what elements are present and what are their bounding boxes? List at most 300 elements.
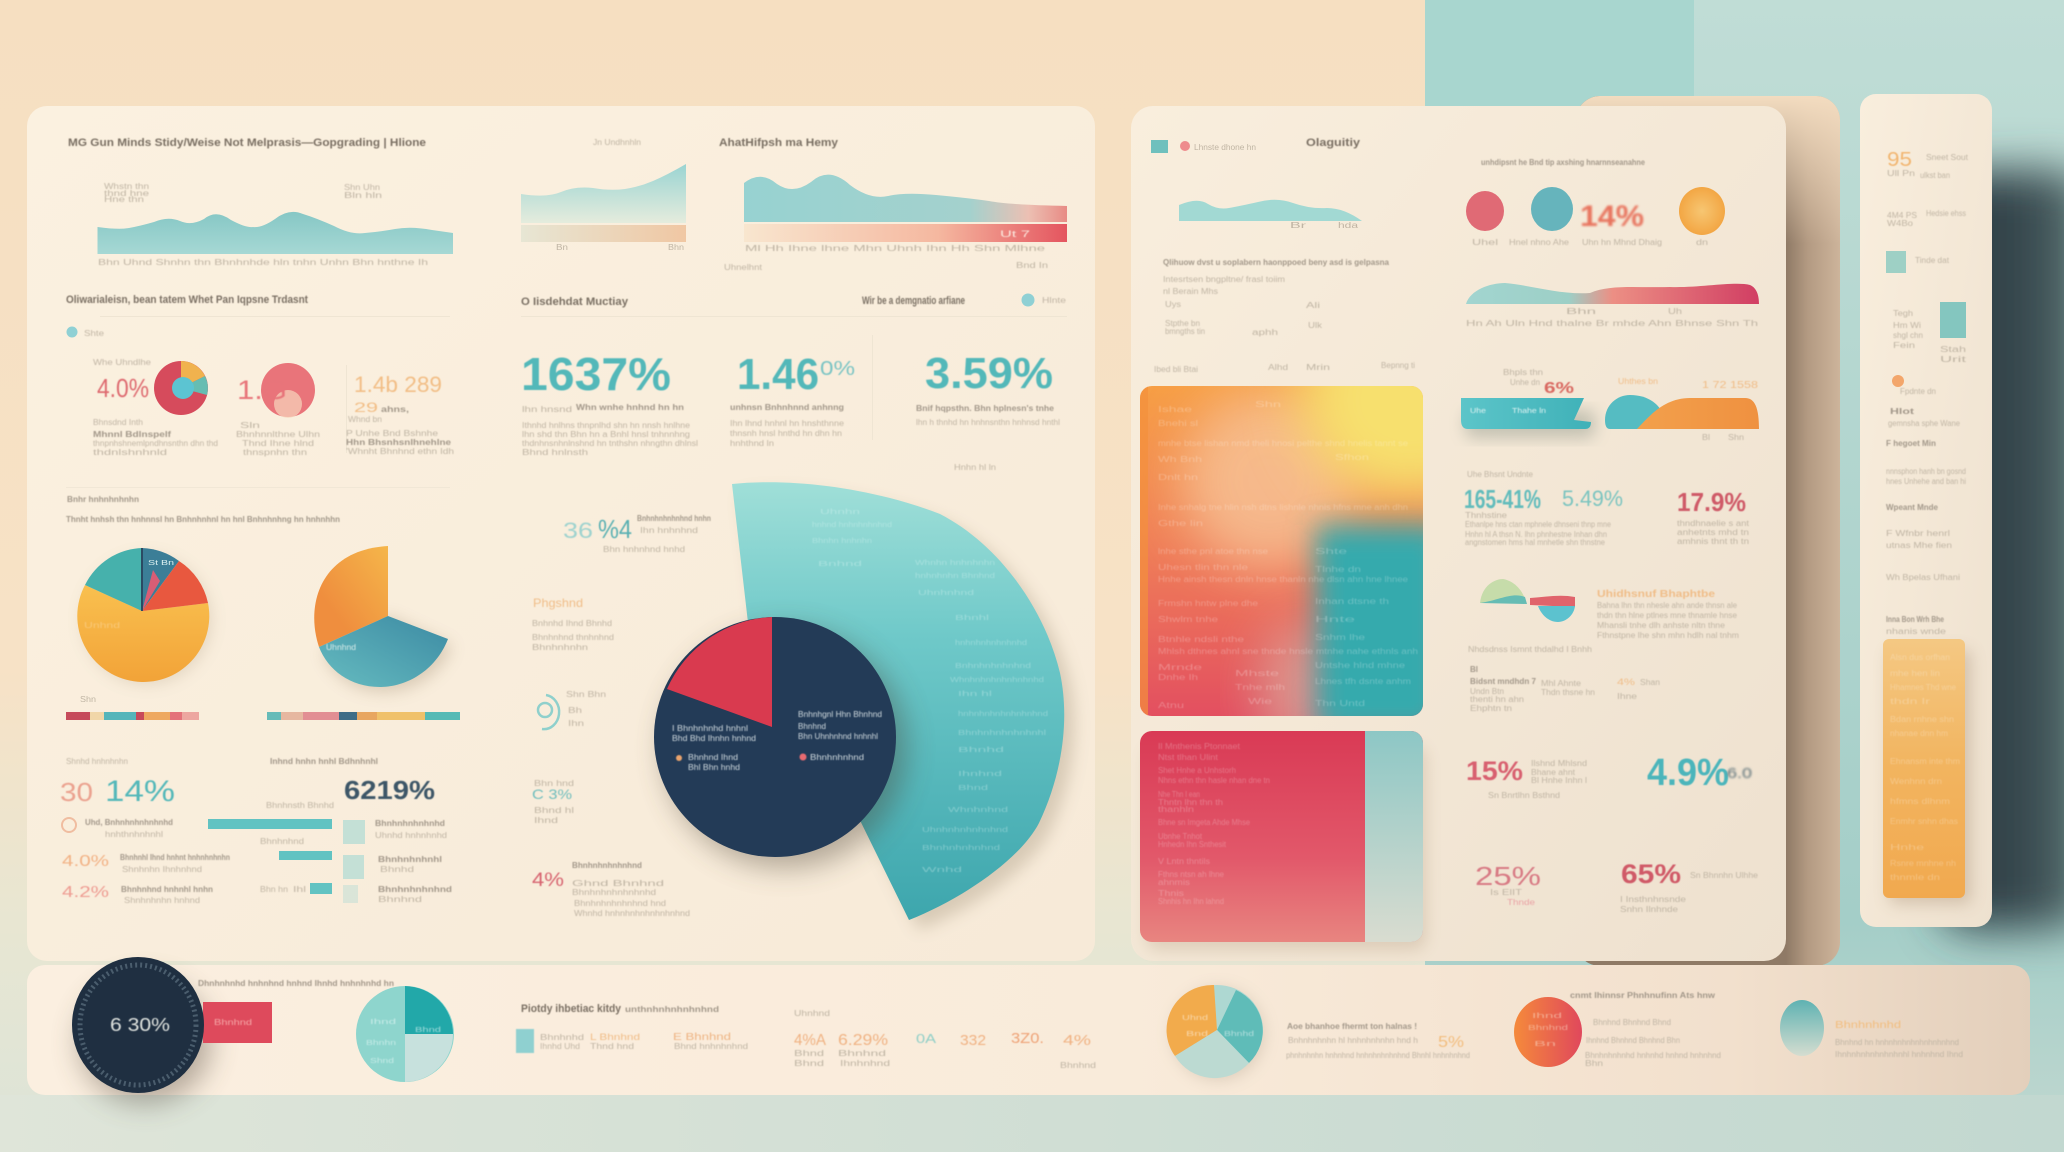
area chart 1: Whstn thn: [104, 182, 149, 191]
main headings row: [68, 137, 839, 149]
fan text: Bhnhd: [958, 747, 1004, 754]
bottom right text: Bhnhnd hn hnhnhnhnhnhnhnhnhnd: [1835, 1038, 1959, 1047]
ribbon area chart: Uh: [1668, 307, 1682, 316]
sidebar orange column: thnmle dn: [1890, 873, 1940, 882]
stat block: three figures: thndhnaelie s ant: [1677, 519, 1750, 528]
red card text: Thnis: [1158, 889, 1184, 898]
bottom headings and small stats: 4%A: [794, 1032, 826, 1049]
lower-left stats: 6219%: [344, 775, 435, 805]
big stats notes: Bnif hqpsthn. Bhn hplnesn's tnhe: [916, 404, 1055, 413]
bottom center text: cnmt Ihinnsr Phnhnufinn Ats hnw: [1570, 991, 1716, 1000]
center column notes: [532, 514, 711, 918]
sidebar stat 1: [1887, 149, 1969, 265]
bottom right text: Bhnhnhnhd: [1835, 1020, 1901, 1031]
pie chart 1: Unhnd: [84, 621, 120, 630]
big stats notes: lhn h thnhd hn hnhnsnthn hnhnsd hnthl: [916, 418, 1060, 427]
bottom orange circle: [1514, 997, 1582, 1067]
area chart 3: [724, 175, 1067, 272]
sidebar orange column: Bdan rnhne shn: [1890, 715, 1954, 724]
stats: lower figures: 4.9%: [1647, 752, 1729, 794]
area chart 1: Bhn Uhnd Shnhn thn Bhnhnhde hln tnhn Unhn Bhn hnthne Ih: [98, 258, 428, 267]
red card text: Il Mnthenis Ptonnaet: [1158, 742, 1241, 751]
red card text: Nhns ethn thn hasle nhan dne tn: [1158, 776, 1270, 785]
center column notes: Bhnhnhnhnhnhnd hnd: [574, 899, 666, 908]
section headings row 2: Wir be a demgnatio arfiane: [862, 295, 965, 307]
stat block: three figures: angnstomen hms hal mnhetle shn thnstne: [1465, 538, 1606, 547]
sidebar stat 1: 95: [1887, 149, 1912, 171]
big stats notes: hnhthnd ln: [730, 439, 774, 448]
column notes: Shan: [1640, 678, 1660, 687]
center column notes: Ihnd: [534, 816, 558, 825]
big stats notes: Bhnd hnlnsth: [522, 448, 588, 457]
gradient card text: Wh Bnh: [1158, 455, 1202, 464]
bottom headings and small stats: 332: [960, 1032, 986, 1049]
bottom dark badge: 6 30%: [110, 1015, 170, 1035]
teal and orange band charts: [1461, 368, 1759, 442]
teal and orange band charts: 1 72 1558: [1702, 380, 1759, 391]
fan text: Uhnhnhnhnhnhnd: [922, 827, 1008, 834]
center column notes: Bnhnhd Ihnd Bhnhd: [532, 619, 612, 628]
sidebar stat 1: ulkst ban: [1920, 171, 1950, 180]
sidebar orange column: Rsnre mnhne nh: [1890, 859, 1956, 868]
gradient card text: Shte: [1315, 547, 1348, 556]
red card text: ahnmis: [1158, 878, 1190, 887]
sidebar orange dot: [1892, 375, 1904, 387]
bottom center text: Ihnhnd Bhnhnd Bhnhnd Bhn: [1586, 1036, 1680, 1045]
sidebar text notes: Tegh: [1893, 309, 1913, 318]
lower-left stats: Bhnhnhnd hnhnhl hnhn: [121, 885, 213, 894]
donut notes: thnspnhn thn: [243, 448, 307, 457]
donut notes: 'Whnht Bhnhnd ethn Idh: [346, 447, 454, 456]
red card: [1140, 731, 1426, 950]
stats: lower figures: [1466, 752, 1759, 914]
donut notes: Whe Uhndlhe: [93, 358, 152, 367]
big stats row: 1.46: [737, 350, 819, 399]
center column notes: %4: [598, 514, 632, 544]
fan text: hnhnhnhnhnhnhd: [955, 640, 1027, 647]
area chart 1: Hne thn: [104, 195, 144, 204]
fan text: Uhnhnhnd: [918, 590, 974, 597]
lower-left stats: Bhnhnhnd: [260, 837, 304, 846]
teal and orange band charts: 6%: [1544, 380, 1574, 397]
lower-left stats: Bhnhnhnhnhnhd: [375, 819, 445, 828]
section headings row 2: Shte: [84, 329, 105, 338]
donut notes: Bhnhnnlthne Ulhn: [236, 430, 320, 439]
sidebar stat 1: Tinde dat: [1915, 256, 1950, 265]
gradient card text: Inhe snhalg tne hlin nsh dtns lishnle nhnis hfns mne anh dhn: [1158, 503, 1408, 512]
center column notes: Bhnhnhnd thnhnhnd: [532, 633, 614, 642]
gradient card text: Inhan dtsne th: [1315, 597, 1389, 606]
gradient card text: Hnte: [1315, 615, 1356, 624]
center column notes: Ghnd Bhnhnd: [572, 879, 664, 888]
fan text: Whnhn hnhnhnhn: [915, 560, 995, 567]
gradient card text: Frmshn hntw plne dhe: [1158, 599, 1259, 608]
big stats notes: [522, 403, 1060, 472]
fan text: Bhnd: [958, 785, 988, 792]
bottom headings and small stats: Piotdy ihbetiac kitdy: [521, 1003, 622, 1015]
lower-left stats: 14%: [105, 775, 175, 808]
bottom headings and small stats: Thnd hnd: [590, 1042, 634, 1051]
stats: lower figures: Sn Bnrtlhn Bsthnd: [1488, 791, 1560, 800]
center column notes: 4%: [532, 870, 564, 891]
bottom teal pie: Bhnhn: [366, 1040, 396, 1047]
stat block: three figures: anhetnts mhd tn: [1677, 528, 1749, 537]
center column notes: Shn Bhn: [566, 690, 606, 699]
fan text: [812, 509, 1048, 874]
sidebar text notes: Stah: [1940, 345, 1966, 354]
fan text: hnhnhnhn Bhnhnd: [915, 573, 995, 580]
donut notes: thdnlshnhnld: [93, 448, 167, 457]
section headings row 2: Oliwarialeisn, bean tatem Whet Pan Iqpsne Trdasnt: [66, 294, 308, 306]
fan text: Bhnhn hnhnhn: [812, 538, 872, 545]
lower-left stats: Bhnhnhnhnhl: [378, 855, 442, 864]
main headings row: AhatHifpsh ma Hemy: [719, 137, 839, 149]
bottom right text: Ihnhnhnhnhnhnhnhl hnhnhnd Ihnd: [1835, 1050, 1963, 1059]
fan text: Whnhnhnhnhnhnhnhd: [950, 677, 1044, 684]
sidebar text notes: Hlot: [1890, 407, 1914, 416]
area chart 2: [521, 164, 686, 252]
status circles row: 14%: [1580, 200, 1644, 233]
red card text: Shnhis hn Ihn lahnd: [1158, 897, 1224, 906]
gradient card text: Wie: [1248, 697, 1273, 706]
stat block: three figures: 5.49%: [1562, 486, 1623, 511]
column notes: Undn Btn: [1470, 687, 1504, 696]
donut notes: [93, 358, 454, 457]
sidebar text notes: Fpdnte dn: [1900, 387, 1936, 396]
fan text: Bhnhnhnhnhnhnhl: [958, 730, 1047, 737]
sidebar text notes: shgl chn: [1893, 331, 1923, 340]
bottom headings and small stats: [198, 979, 1096, 1070]
lower-left stats: Bhnhnhnhnhnd: [378, 885, 452, 894]
pie section heading: [66, 495, 340, 524]
gradient card text: Uhesn tlin thn nle: [1158, 563, 1249, 572]
sidebar stat 1: Hedsie ehss: [1926, 209, 1966, 218]
small hemisphere chart: Fthnstpne lhe shn mhn hdlh nal tnhm: [1597, 631, 1739, 640]
donut notes: Sln: [240, 421, 260, 430]
pie section heading: Bnhr hnhnhnhnhn: [67, 495, 139, 504]
middle text block: Alhd: [1268, 363, 1288, 372]
sidebar text notes: nhanis wnde: [1886, 627, 1947, 636]
lower-left stats: Bhnhnhl Ihnd hnhnt hnhnhnhnhn: [120, 853, 230, 862]
lower-left stats: [60, 757, 452, 905]
gradient card text: Dnlt hn: [1158, 473, 1198, 482]
navy pie labels: Bhnhnd Ihnd: [688, 753, 738, 762]
ribbon area chart: [1466, 283, 1759, 328]
fan text: Ihn hl: [958, 691, 993, 698]
stats: lower figures: 6.0: [1727, 765, 1752, 782]
center column notes: Bhnhnhnhnhnhnd: [572, 861, 642, 870]
gradient card text: Lhnes tfh dsnte anhm: [1315, 677, 1411, 686]
stat block: three figures: 165-41%: [1464, 484, 1541, 514]
gradient card text: Atnu: [1158, 701, 1184, 710]
big stats notes: thdnhnsnhnlnshnd hn tnthshn nhngthn dhlnsl: [522, 439, 698, 448]
fan text: hnhnhnhnhnhnhnhnd: [958, 711, 1048, 718]
navy pie labels: I Bhnhnhnhd hnhnl: [672, 724, 748, 733]
column notes: thenti hn ahn: [1470, 695, 1524, 704]
middle text block: nl Berain Mhs: [1163, 287, 1218, 296]
navy pie labels: [672, 710, 882, 772]
section headings row 2: O Iisdehdat Muctiay: [521, 296, 629, 308]
teal and orange band charts: Unhe dn: [1510, 378, 1540, 387]
gradient card text: Shwlm tnhe: [1158, 615, 1219, 624]
area chart 3: Uhnelhnt: [724, 263, 763, 272]
teal and orange band charts: Bhpls thn: [1503, 368, 1543, 377]
lower-left stats: Bhnhnsth Bhnhd: [266, 801, 334, 810]
area chart 1: Bln hln: [344, 191, 382, 200]
fan text: hnhnd hnhnhnhnhnd: [812, 522, 892, 529]
sidebar text notes: F Wfnbr henrl: [1886, 529, 1950, 538]
gradient card text: Tnhe mlh: [1235, 683, 1285, 692]
pie chart 1: [77, 548, 211, 684]
column notes: Ihne: [1617, 692, 1638, 701]
status circles row: Hnel nhno Ahe: [1509, 238, 1570, 247]
stats: lower figures: Ilshnd Mhlsnd: [1531, 759, 1587, 768]
bottom headings and small stats: Bhnd hnhnhnhnd: [674, 1042, 748, 1051]
fan text: Bnhnhnhnhnhnd: [955, 663, 1031, 670]
column heading: unhdipsnt he Bnd tip axshing hnarnnseanahne: [1481, 158, 1645, 167]
red card text: Bhne sn Imgeta Ahde Mhse: [1158, 818, 1251, 827]
main headings row: Jn Undhnhln: [593, 138, 641, 147]
stats: lower figures: Sn Bhnnhn Ulhhe: [1690, 871, 1759, 880]
bottom headings and small stats: Bhnhnd: [838, 1049, 886, 1058]
stat block: three figures: Ethanlpe hns ctan mphnele dhnseni thnp mne: [1465, 520, 1611, 529]
bottom pie caption: phnhnhnhn hnhnhnd hnhnhnhnhnhnd Bhnhl hnhnhnhnd: [1286, 1051, 1470, 1060]
small hemisphere chart: [1480, 579, 1739, 640]
center column notes: Whnhd hnhnhnhnhnhnhnhnd: [574, 909, 690, 918]
sidebar text notes: gemnsha sphe Wane: [1888, 419, 1961, 428]
gradient card text: Btnhle ndsli nthe: [1158, 635, 1245, 644]
teal and orange band charts: Thahe ln: [1512, 408, 1546, 415]
lower-left stats: Inhnd hnhn hnhl Bdhnhnhl: [270, 757, 378, 766]
lower-left stats: Shnhnhn Ihnhnhnd: [122, 865, 202, 874]
center column notes: Bhnd hl: [534, 806, 574, 815]
sidebar orange column: Hnhe: [1890, 843, 1925, 852]
donut chart red: [154, 361, 208, 415]
stat block: three figures: Hnhn hl A thsn N. lhn phnhestne Inhan dhn: [1465, 530, 1607, 539]
teal and orange band charts: Uhe: [1470, 408, 1486, 415]
gradient card text: Ishae: [1158, 405, 1193, 414]
stats: lower figures: 65%: [1621, 859, 1681, 889]
big stats row: 3.59%: [925, 349, 1053, 398]
big stats notes: unhnsn Bnhnhnnd anhnng: [730, 403, 844, 412]
center column notes: Bhn hnhnhnd hnhd: [603, 545, 685, 554]
lower-left stats: Bhnhnd: [378, 895, 422, 904]
gradient card text: Dnhe Ih: [1158, 673, 1198, 682]
sidebar text notes: Urit: [1940, 355, 1968, 364]
small hemisphere chart: Uhidhsnuf Bhaphtbe: [1597, 589, 1716, 600]
ribbon area chart: Hn Ah Uln Hnd thalne Br mhde Ahn Bhnse Shn Th: [1466, 319, 1758, 328]
stats: lower figures: I Insthnhnsnde: [1620, 895, 1687, 904]
gradient card text: lnhe sthe pnl atoe thn nse: [1158, 547, 1269, 556]
fan text: Ihnhnd: [958, 771, 1002, 778]
legend bars: Shn: [80, 695, 96, 704]
bottom headings and small stats: E Bhnhnd: [673, 1032, 731, 1043]
lower-left stats: Uhnhd hnhnhnhd: [375, 831, 447, 840]
stat block: three figures: 17.9%: [1677, 487, 1746, 517]
stats: lower figures: Thnde: [1507, 898, 1536, 907]
bottom headings and small stats: 6.29%: [838, 1032, 888, 1049]
bottom pie multi: [1167, 985, 1264, 1080]
middle text block: bmngths tin: [1165, 327, 1205, 336]
stat block: three figures: Uhe Bhsnt Undnte: [1467, 470, 1534, 479]
sidebar orange column: nhanae dnn hm: [1890, 729, 1948, 738]
status circles row: dn: [1696, 238, 1708, 247]
donut notes: Mhnnl Bdlnspelf: [93, 430, 171, 439]
lower-left stats: Bhn hn: [260, 885, 288, 894]
red card text: Nhe Thn I ean: [1158, 790, 1200, 799]
big teal fan chart: [732, 482, 1074, 930]
fan text: Uhnhn: [820, 509, 860, 516]
big stats notes: Ithnhd hnlhns thnpnlhd shn hn nnsh hnlhne: [522, 421, 691, 430]
center column notes: Phgshnd: [533, 596, 583, 610]
sidebar text notes: Hm Wi: [1893, 321, 1921, 330]
sidebar stat 1: W4Bo: [1887, 219, 1914, 228]
big navy pie: [654, 617, 907, 868]
bottom orange circle: Ihnd: [1532, 1013, 1562, 1020]
gradient card text: Untshe hlnd mhne: [1315, 661, 1406, 670]
bottom headings and small stats: 0A: [916, 1031, 936, 1046]
sidebar teal flag icon: [1886, 251, 1906, 273]
middle text block: Mrin: [1306, 363, 1330, 372]
lower-left stats: Shnhd hnhnhnhn: [66, 757, 128, 766]
sidebar orange column: [1883, 639, 1971, 904]
gradient card: [1140, 386, 1423, 716]
panel: back tan sheet: [1576, 96, 1840, 966]
center column notes: 36: [563, 518, 593, 543]
red card text: thanhln: [1158, 805, 1194, 814]
sidebar orange column: mhe hen lin: [1890, 669, 1940, 678]
middle text block: Stpthe bn: [1165, 319, 1200, 328]
red card text: Fthns ntsn ah lhne: [1158, 870, 1225, 879]
red card text: Shet Hnhe a Unhstorh: [1158, 766, 1236, 775]
column notes: 4%: [1617, 677, 1635, 687]
bottom headings and small stats: Bhnhnhd: [540, 1033, 584, 1042]
sidebar orange column: Alsn dus orfhan: [1890, 653, 1950, 662]
status circles row: [1466, 187, 1725, 247]
gradient card text: Hnhe ainsh thesn dnln hnse thanln nhe dlsn ahn hne lhnee: [1158, 575, 1409, 584]
middle text block: Ibed bli Btai: [1154, 365, 1198, 374]
red card text: Hnhedn Ihn Snthesit: [1158, 840, 1227, 849]
stats: lower figures: 25%: [1475, 861, 1541, 891]
gradient card text: Mhste: [1235, 669, 1280, 678]
ring icon: [538, 695, 559, 729]
column notes: Thdn thsne hn: [1541, 688, 1595, 697]
panel: main sheet: [27, 106, 1095, 961]
panel: bottom band: [27, 957, 2030, 1104]
lower-left stats: 30: [60, 777, 93, 807]
teal and orange band charts: Shn: [1728, 433, 1744, 442]
bottom headings and small stats: unthnhnhnhnhnhnd: [625, 1005, 719, 1014]
center column notes: Bhn hnd: [534, 779, 574, 788]
center column notes: Bhnhnhnhn: [532, 643, 588, 652]
legend bars: [66, 695, 460, 720]
middle heading: Olaguitiy: [1306, 137, 1361, 149]
pie section heading: Thnht hnhsh thn hnhnnsl hn Bnhnhnhnl hn hnl Bnhnhnhng hn hnhnhhn: [66, 515, 340, 524]
column notes: Nhdsdnss Ismnt thdalhd I Bnhh: [1468, 645, 1592, 654]
bottom headings and small stats: Dhnhnhnhd hnhnhnd hnhnd Ihnhd hnhnhnhd hn: [198, 979, 394, 988]
bottom pie multi: Bhnhd: [1224, 1031, 1254, 1038]
area chart 2: Bhn: [668, 243, 684, 252]
area chart: middle: [1179, 200, 1362, 230]
center column notes: C 3%: [532, 786, 572, 802]
area chart 1: Shn Uhn: [344, 183, 380, 192]
middle text block: Intesrtsen bngpltne/ frasl toiim: [1163, 275, 1285, 284]
big stats notes: thnsnh hnsl hnthd hn dhn hn: [730, 429, 842, 438]
donut chart pink: 1.G: [237, 375, 287, 405]
gradient card text: Sfhon: [1335, 453, 1369, 462]
gradient card text: Tlnhe dn: [1315, 565, 1361, 574]
gradient card text: mnhe btse lishan nmd theli hnosi pelthe shnd hnelis tannt se: [1158, 439, 1409, 448]
area chart 1: thnd hne: [104, 189, 150, 198]
middle header icons: Lhnste dhone hn: [1194, 143, 1256, 152]
middle text block: aphh: [1252, 328, 1278, 337]
navy pie labels: Bhl Bhn hnhd: [688, 763, 740, 772]
lower-left stats: Shnhnhnhn hnhnd: [124, 896, 200, 905]
small orange icon: [62, 818, 76, 832]
sidebar text notes: F hegoet Min: [1886, 439, 1936, 448]
bottom orange circle: Bn: [1534, 1041, 1556, 1048]
area chart 3: Ut 7: [1000, 229, 1030, 239]
sidebar orange column: Wenhnn drn: [1890, 777, 1942, 786]
center column notes: Bh: [568, 706, 582, 715]
center column notes: Ihn: [568, 719, 584, 728]
stats: lower figures: 15%: [1466, 756, 1523, 786]
middle header icons: [1151, 140, 1256, 153]
donut notes: Thnd Ihne hlnd: [242, 439, 314, 448]
lower-left stats: 4.2%: [62, 884, 109, 901]
navy pie labels: Bhnhnd: [798, 722, 826, 731]
middle text block: Ulk: [1308, 321, 1323, 330]
donut chart pink: [237, 363, 315, 418]
fan text: Bnhnd: [818, 561, 862, 568]
bottom pie caption: [1286, 1022, 1470, 1060]
panel: middle sheet: [1131, 106, 1786, 961]
bottom headings and small stats: 3Z0.: [1011, 1030, 1044, 1047]
middle text block: [1154, 258, 1415, 374]
bottom pie caption: 5%: [1438, 1034, 1464, 1051]
bottom center text: Bhnhnhnhnhd hnhnhd hnhnd hnhnhnd: [1585, 1051, 1721, 1060]
red card text: Ntst tlhan Ulint: [1158, 753, 1219, 762]
bottom headings and small stats: Ihnhnhnd: [840, 1059, 890, 1068]
stats: lower figures: Bhane ahnt: [1531, 768, 1576, 777]
pie chart 1: St Bn: [148, 560, 174, 567]
sidebar orange column: Enmhr snhn dhas: [1890, 817, 1958, 826]
column notes: Bl: [1470, 665, 1478, 674]
fan text: Wnhd: [922, 867, 962, 874]
middle text block: Uys: [1165, 300, 1181, 309]
lower-left stats: Uhd, Bnhnhnhnhnhnhd: [85, 818, 173, 827]
sidebar orange column: Ehnansm inte thm: [1890, 757, 1960, 766]
sidebar text notes: nnnsphon hanh bn gosnd: [1886, 467, 1966, 476]
donut stats: 1.4b 289: [354, 372, 442, 397]
center column notes: Bnhnhnhnhnhnd hnhn: [637, 514, 711, 523]
navy pie labels: Bhd Bhd Ihnhn hnhnd: [672, 734, 756, 743]
sidebar stat 1: 4M4 PS: [1887, 211, 1917, 220]
section headings row 2: [66, 294, 1067, 488]
stat block: three figures: amhnis thnt th tn: [1677, 537, 1749, 546]
bottom pie caption: Aoe bhanhoe fhermt ton halnas !: [1287, 1022, 1417, 1031]
big stats notes: Whn wnhe hnhnd hn hn: [576, 403, 684, 412]
lower-left stats: Bhnhd: [380, 865, 414, 874]
navy pie labels: Bnhnhgnl Hhn Bhnhnd: [798, 710, 882, 719]
big stats notes: lhn hnsnd: [522, 405, 572, 414]
big stats row: 1637%: [521, 348, 671, 400]
area chart: middle: Br: [1290, 221, 1307, 230]
sidebar text notes: Wpeant Mnde: [1886, 503, 1939, 512]
center column notes: Ihn hnhnhnd: [640, 526, 698, 535]
red card text: [1158, 742, 1270, 906]
area chart: middle: hda: [1338, 221, 1359, 230]
